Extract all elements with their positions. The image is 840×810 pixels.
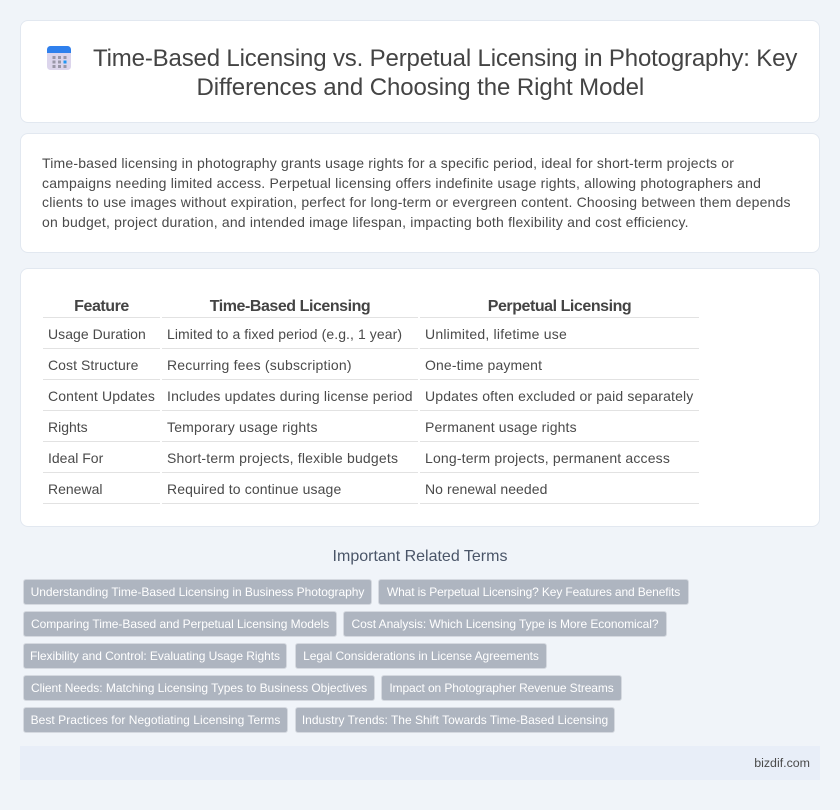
tag: What is Perpetual Licensing? Key Features and Benefits <box>387 585 680 599</box>
panel: comparison table <box>20 268 820 527</box>
tag: Best Practices for Negotiating Licensing Terms <box>31 713 280 727</box>
tag: Impact on Photographer Revenue Streams <box>389 681 614 695</box>
tag: Client Needs: Matching Licensing Types to Business Objectives <box>31 681 367 695</box>
comparison table: Recurring fees (subscription) <box>167 357 352 373</box>
row: cost structure: Cost Structure <box>48 357 138 373</box>
row: rights: Rights <box>48 419 88 435</box>
panel: intro text <box>20 133 820 253</box>
comparison table: Long-term projects, permanent access <box>425 450 670 466</box>
comparison table: Includes updates during license period <box>167 388 413 404</box>
comparison table <box>43 298 699 504</box>
panel: title card <box>20 20 820 123</box>
tag: Legal Considerations in License Agreements <box>303 649 539 663</box>
row: ideal for: Ideal For <box>48 450 103 466</box>
tag <box>23 707 288 733</box>
tag <box>23 675 375 701</box>
comparison table: No renewal needed <box>425 481 547 497</box>
text: Differences and Choosing the Right Model <box>196 74 644 101</box>
comparison table: Unlimited, lifetime use <box>425 326 567 342</box>
text block: intro <box>42 155 791 230</box>
tag: Understanding Time-Based Licensing in Business Photography <box>31 585 364 599</box>
tag: Comparing Time-Based and Perpetual Licensing Models <box>31 617 329 631</box>
tag <box>381 675 622 701</box>
comparison table: Short-term projects, flexible budgets <box>167 450 398 466</box>
comparison table: Required to continue usage <box>167 481 341 497</box>
table header: Feature <box>74 298 129 315</box>
row: content updates: Content Updates <box>48 388 155 404</box>
footer text: bizdif.com <box>754 756 810 770</box>
tag: Flexibility and Control: Evaluating Usage Rights <box>30 649 280 663</box>
text block: intro: Time-based licensing in photography grants usage rights for a specific period, ideal for short-term projects or <box>42 155 734 171</box>
heading: related terms: Important Related Terms <box>333 548 507 565</box>
text: Time-Based Licensing vs. Perpetual Licensing in Photography: Key <box>93 45 797 72</box>
tag: Cost Analysis: Which Licensing Type is More Economical? <box>352 617 658 631</box>
row: usage duration: Usage Duration <box>48 326 146 342</box>
comparison table: One-time payment <box>425 357 542 373</box>
tag <box>295 707 615 733</box>
icon: calendar <box>47 46 71 70</box>
comparison table: Perpetual Licensing <box>488 298 631 315</box>
text block: intro: on budget, project duration, and intended image lifespan, impacting both flexibility and cost efficiency. <box>42 214 689 230</box>
tag <box>23 611 337 637</box>
row: renewal: Renewal <box>48 481 102 497</box>
tag <box>343 611 667 637</box>
tag <box>23 643 287 669</box>
text block: intro: clients to use images without expiration, perfect for long-term or evergreen content. Choosing between them depends <box>42 194 791 210</box>
tag <box>23 579 372 605</box>
tag <box>295 643 547 669</box>
comparison table: Time-Based Licensing <box>210 298 370 315</box>
comparison table: Permanent usage rights <box>425 419 577 435</box>
title <box>93 45 798 101</box>
text block: intro: campaigns needing limited access. Perpetual licensing offers indefinite usage rights, allowing photographers and <box>42 175 761 191</box>
tag: Industry Trends: The Shift Towards Time-Based Licensing <box>302 713 608 727</box>
footer bar <box>20 746 820 780</box>
related term tags <box>23 579 689 733</box>
comparison table: Temporary usage rights <box>167 419 318 435</box>
comparison table: Limited to a fixed period (e.g., 1 year) <box>167 326 402 342</box>
comparison table: Updates often excluded or paid separately <box>425 388 693 404</box>
tag <box>378 579 689 605</box>
